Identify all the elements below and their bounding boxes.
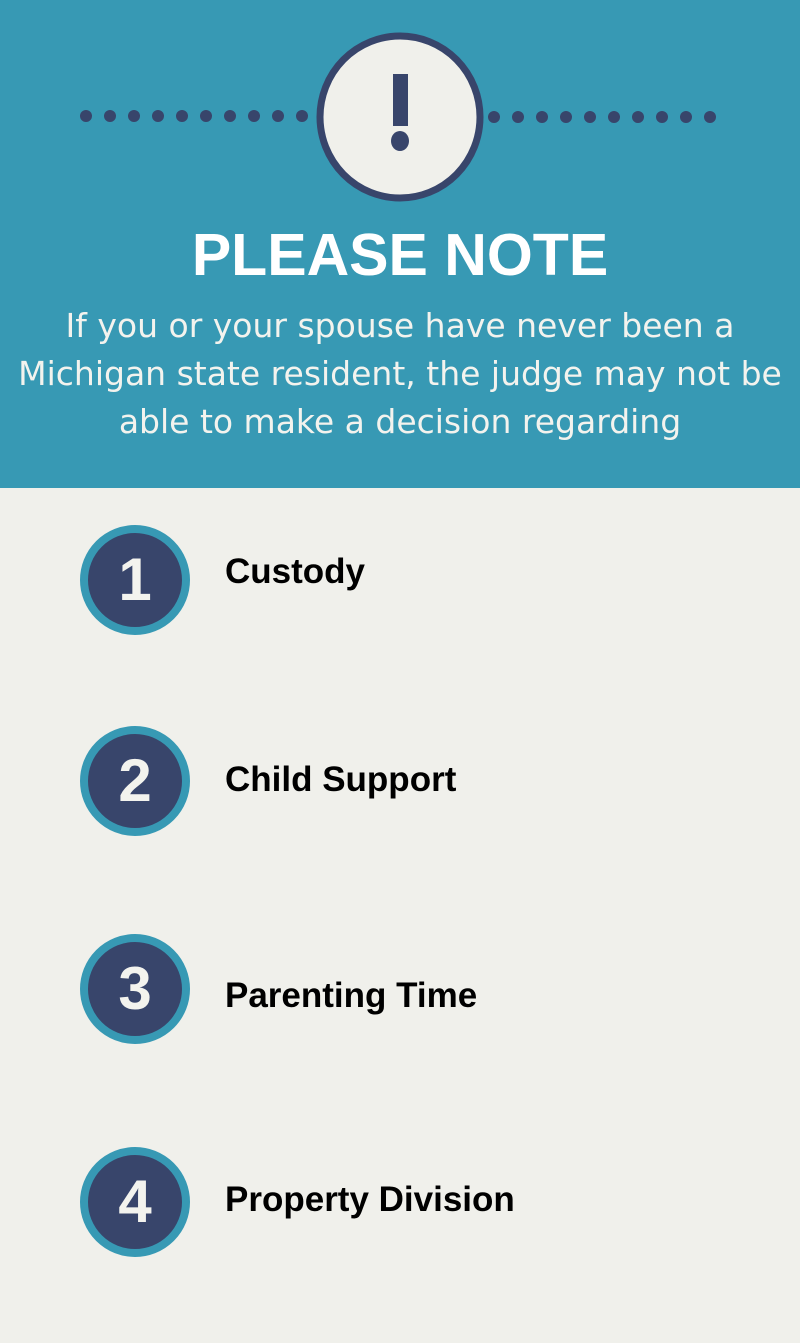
item 1 [80,525,365,635]
header band [0,0,800,488]
item 2 [80,726,456,836]
item 1: Custody [225,552,365,591]
icon: exclamation with dotted line [80,32,716,202]
item 4: 4 [118,1168,152,1235]
text block: note: If you or your spouse have never been a [66,306,734,345]
text block: note [18,306,782,441]
text block: note: able to make a decision regarding [119,402,681,441]
item 2: 2 [118,747,152,814]
item 3: Parenting Time [225,976,477,1015]
item 4 [80,1147,515,1257]
item 3 [80,934,477,1044]
item 3: 3 [118,955,152,1022]
item 4: Property Division [225,1180,515,1219]
item 2: Child Support [225,760,456,799]
item 1: 1 [118,546,152,613]
text block: note: Michigan state resident, the judge may not be [18,354,782,393]
title: PLEASE NOTE [192,222,608,288]
